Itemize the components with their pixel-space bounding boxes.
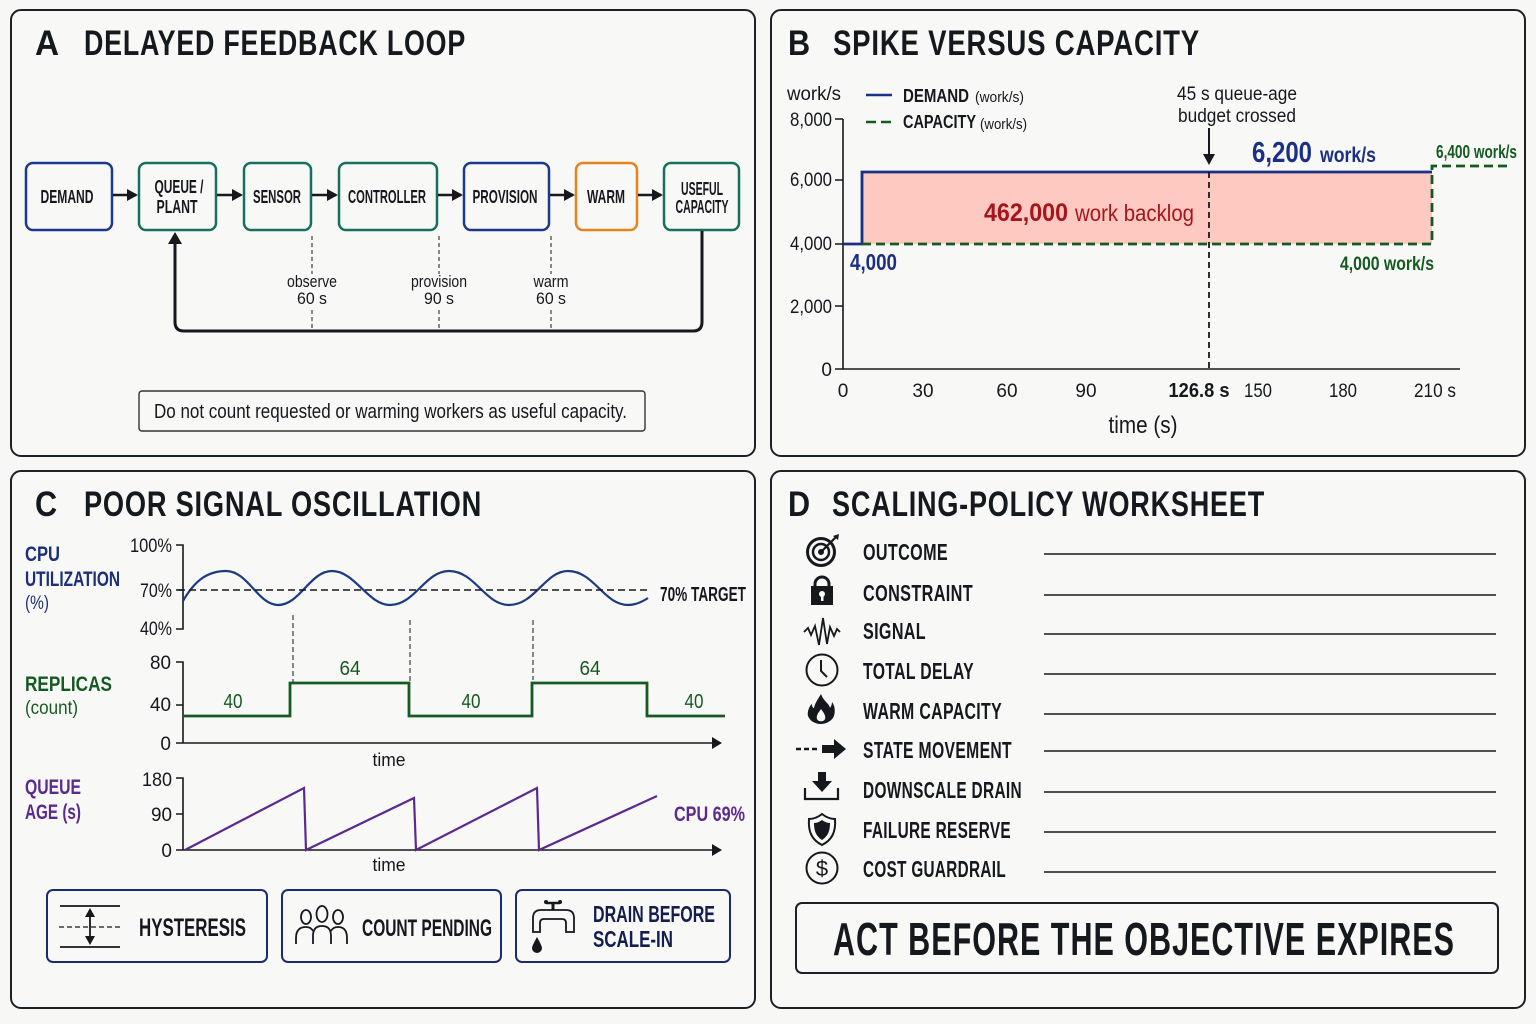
card: hysteresis xyxy=(47,890,267,962)
row: cost guardrail xyxy=(806,852,1006,884)
chart: CPU utilization: 100% xyxy=(130,536,172,557)
heading: panel B: SPIKE VERSUS CAPACITY xyxy=(833,24,1200,63)
axis labels: time (s) xyxy=(1108,412,1178,439)
axis labels: 2,000 xyxy=(790,297,832,318)
row: failure reserve: FAILURE RESERVE xyxy=(863,817,1011,843)
row: constraint xyxy=(811,577,973,606)
chart: queue age: 180 xyxy=(142,770,172,791)
chart: replicas: 40 xyxy=(150,695,171,716)
chart: queue age: AGE (s) xyxy=(25,801,81,824)
panel: poor signal oscillation xyxy=(11,471,755,1008)
row: cost guardrail: COST GUARDRAIL xyxy=(863,856,1006,882)
axis labels: 60 xyxy=(996,381,1018,402)
box: useful capacity: USEFUL xyxy=(681,179,723,199)
value labels xyxy=(850,137,1517,275)
heading: panel B: B xyxy=(788,24,811,63)
row: constraint: CONSTRAINT xyxy=(863,580,973,606)
chart: backlog area xyxy=(862,172,1432,244)
delay marker: observe: 60 s xyxy=(297,289,327,308)
box: demand: DEMAND xyxy=(40,187,94,207)
arrows: forward flow xyxy=(113,194,661,196)
row: cost guardrail: $ xyxy=(816,856,828,881)
delay marker: provision: provision xyxy=(411,272,467,291)
box: controller: CONTROLLER xyxy=(348,187,426,207)
box: useful capacity xyxy=(664,163,739,230)
box: sensor: SENSOR xyxy=(253,187,301,207)
axis labels: 126.8 s xyxy=(1168,380,1230,402)
heading: panel A: DELAYED FEEDBACK LOOP xyxy=(84,24,466,63)
row: signal: SIGNAL xyxy=(863,618,926,644)
chart: CPU utilization: CPU xyxy=(25,543,60,566)
box: useful capacity: CAPACITY xyxy=(676,197,728,217)
axis labels: 90 xyxy=(1075,381,1097,402)
row: outcome xyxy=(808,534,948,566)
chart: queue age: time xyxy=(372,855,406,875)
chart: replicas: (count) xyxy=(25,698,78,719)
box: queue plant xyxy=(139,163,216,230)
legend: (work/s) xyxy=(975,89,1024,106)
chart: queue age xyxy=(25,770,745,875)
worksheet lines xyxy=(1044,554,1496,872)
chart: replicas: 40 xyxy=(462,691,480,713)
heading: panel A: A xyxy=(35,24,60,63)
icon: faucet and drop xyxy=(532,900,574,953)
delay marker: warm xyxy=(533,236,568,328)
row: total delay xyxy=(806,654,974,686)
line: demand xyxy=(843,172,1432,244)
value labels: 4,000 xyxy=(850,249,897,275)
chart: backlog area: work backlog xyxy=(1074,200,1194,226)
row: state movement xyxy=(796,737,1012,763)
marker: 45 s queue-age budget crossed: budget crossed xyxy=(1178,106,1296,127)
chart: replicas: time xyxy=(372,750,406,770)
chart: CPU utilization: 70% xyxy=(140,581,172,602)
card: drain before scale-in: SCALE-IN xyxy=(593,926,673,952)
row: outcome: OUTCOME xyxy=(863,539,948,565)
chart: replicas: 0 xyxy=(160,734,171,755)
heading: panel D: SCALING-POLICY WORKSHEET xyxy=(832,485,1265,524)
heading: panel C: C xyxy=(35,485,58,524)
chart: queue age: CPU 69% xyxy=(674,803,745,826)
axis labels: 150 xyxy=(1244,381,1272,402)
chart: replicas: 64 xyxy=(340,658,360,680)
delay marker: warm: 60 s xyxy=(536,289,566,308)
marker: 45 s queue-age budget crossed xyxy=(1177,84,1297,369)
axis labels: 180 xyxy=(1329,381,1357,402)
panel: spike versus capacity xyxy=(771,10,1525,456)
legend xyxy=(866,86,1027,133)
callout: useful capacity note: Do not count requested or warming workers as useful capacity. xyxy=(154,401,627,423)
chart: CPU utilization: 40% xyxy=(140,619,172,640)
delay marker: observe xyxy=(287,236,337,328)
chart: queue age: 0 xyxy=(161,841,172,862)
value labels: work/s xyxy=(1319,144,1376,167)
delay marker: provision xyxy=(411,236,467,328)
icon: people xyxy=(296,906,347,944)
axis labels xyxy=(786,84,1456,439)
card: drain before scale-in xyxy=(516,890,730,962)
card: count pending xyxy=(282,890,501,962)
chart: replicas: 80 xyxy=(150,653,171,674)
chart: CPU utilization xyxy=(25,536,746,640)
chart axes xyxy=(835,119,1460,369)
card: drain before scale-in: DRAIN BEFORE xyxy=(593,901,715,927)
chart: backlog area: 462,000 xyxy=(984,199,1068,227)
box: queue plant: PLANT xyxy=(156,197,198,217)
value labels: 6,200 xyxy=(1252,137,1312,169)
card: hysteresis: HYSTERESIS xyxy=(139,914,246,942)
box: sensor xyxy=(244,163,311,230)
legend: CAPACITY xyxy=(903,112,976,132)
chart: replicas: 40 xyxy=(684,691,704,713)
row: warm capacity: WARM CAPACITY xyxy=(863,698,1002,724)
axis labels: 210 s xyxy=(1414,381,1456,402)
panel: scaling-policy worksheet xyxy=(771,471,1525,1008)
axis labels: 8,000 xyxy=(790,110,832,131)
row: state movement: STATE MOVEMENT xyxy=(863,737,1012,763)
chart: queue age: QUEUE xyxy=(25,776,81,799)
delay marker: warm: warm xyxy=(533,272,568,291)
banner: act before the objective expires xyxy=(796,903,1498,973)
axis labels: 0 xyxy=(821,360,832,381)
legend: DEMAND xyxy=(903,86,969,106)
panel: delayed feedback loop xyxy=(11,10,755,456)
delay marker: provision: 90 s xyxy=(424,289,454,308)
chart: CPU utilization: UTILIZATION xyxy=(25,568,120,591)
box: warm xyxy=(576,163,637,230)
delay marker: observe: observe xyxy=(287,272,337,291)
legend: (work/s) xyxy=(980,116,1027,133)
chart: queue age: 90 xyxy=(151,805,172,826)
row: total delay: TOTAL DELAY xyxy=(863,658,974,684)
row: warm capacity xyxy=(808,694,1002,724)
arrow: feedback path xyxy=(168,231,702,331)
box: controller xyxy=(339,163,437,230)
heading: panel A xyxy=(35,24,466,63)
chart: CPU utilization: 70% TARGET xyxy=(660,584,746,606)
axis labels: 6,000 xyxy=(790,170,832,191)
callout: useful capacity note xyxy=(139,391,645,431)
row: signal xyxy=(804,618,926,645)
axis labels: 30 xyxy=(912,381,934,402)
marker: 45 s queue-age budget crossed: 45 s queue-age xyxy=(1177,84,1297,105)
row: downscale drain: DOWNSCALE DRAIN xyxy=(863,777,1022,803)
card: count pending: COUNT PENDING xyxy=(362,915,492,942)
box: warm: WARM xyxy=(587,187,625,207)
icon: hysteresis band xyxy=(59,906,121,947)
chart: replicas: REPLICAS xyxy=(25,673,112,696)
row: downscale drain xyxy=(805,772,1022,803)
row: failure reserve xyxy=(809,814,1011,845)
box: queue plant: QUEUE / xyxy=(154,177,204,197)
chart: CPU utilization: (%) xyxy=(25,593,49,614)
chart: replicas xyxy=(25,615,725,770)
axis labels: work/s xyxy=(786,84,841,105)
box: demand xyxy=(26,163,112,230)
chart: replicas: 40 xyxy=(224,691,242,713)
box: provision xyxy=(464,163,549,230)
value labels: 4,000 work/s xyxy=(1340,254,1434,275)
axis labels: 4,000 xyxy=(790,234,832,255)
heading: panel D: D xyxy=(788,485,811,524)
line: capacity xyxy=(862,166,1511,244)
box: provision: PROVISION xyxy=(472,187,538,207)
chart: replicas: 64 xyxy=(580,658,600,680)
axis labels: 0 xyxy=(838,381,848,402)
heading: panel C: POOR SIGNAL OSCILLATION xyxy=(84,485,482,524)
